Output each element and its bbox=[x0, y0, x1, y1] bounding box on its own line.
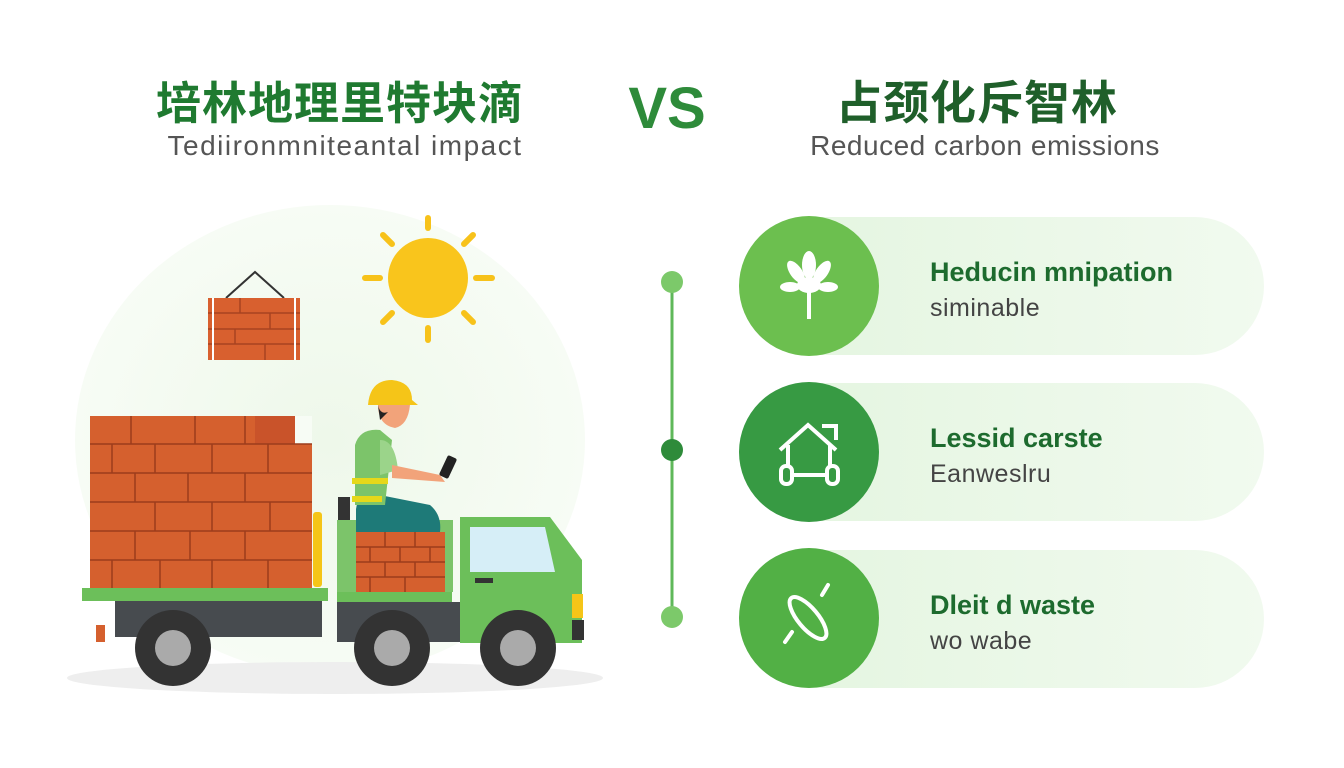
icon: waste bbox=[739, 548, 879, 688]
card 3 bbox=[739, 548, 1264, 688]
left subtitle: Tediironmniteantal impact bbox=[168, 130, 522, 161]
card 1: siminable bbox=[930, 294, 1040, 322]
timeline bbox=[661, 271, 683, 628]
left title: 培林地理里特块滴 bbox=[156, 78, 524, 129]
card 1: Heducin mnipation bbox=[930, 257, 1173, 287]
card 3: Dleit d waste bbox=[930, 590, 1095, 620]
card 3: wo wabe bbox=[929, 627, 1032, 655]
brick stack bbox=[90, 416, 312, 588]
card 2 bbox=[739, 382, 1264, 522]
truck body bbox=[82, 517, 584, 643]
right title: 占颈化斥智林 bbox=[836, 77, 1118, 129]
small brick pile bbox=[356, 532, 445, 592]
icon: sun bbox=[365, 218, 492, 340]
icon: hanging bricks bbox=[208, 272, 300, 360]
card 1 bbox=[739, 216, 1264, 356]
card 2: Lessid carste bbox=[930, 423, 1103, 453]
worker bbox=[352, 380, 457, 532]
wheels bbox=[135, 610, 556, 686]
VS label: VS bbox=[628, 76, 706, 141]
illustration: brick truck bbox=[67, 205, 603, 694]
card 2: Eanweslru bbox=[930, 460, 1051, 488]
icon: house cart bbox=[739, 382, 879, 522]
right subtitle: Reduced carbon emissions bbox=[810, 130, 1160, 161]
icon: leaf plant bbox=[739, 216, 879, 356]
